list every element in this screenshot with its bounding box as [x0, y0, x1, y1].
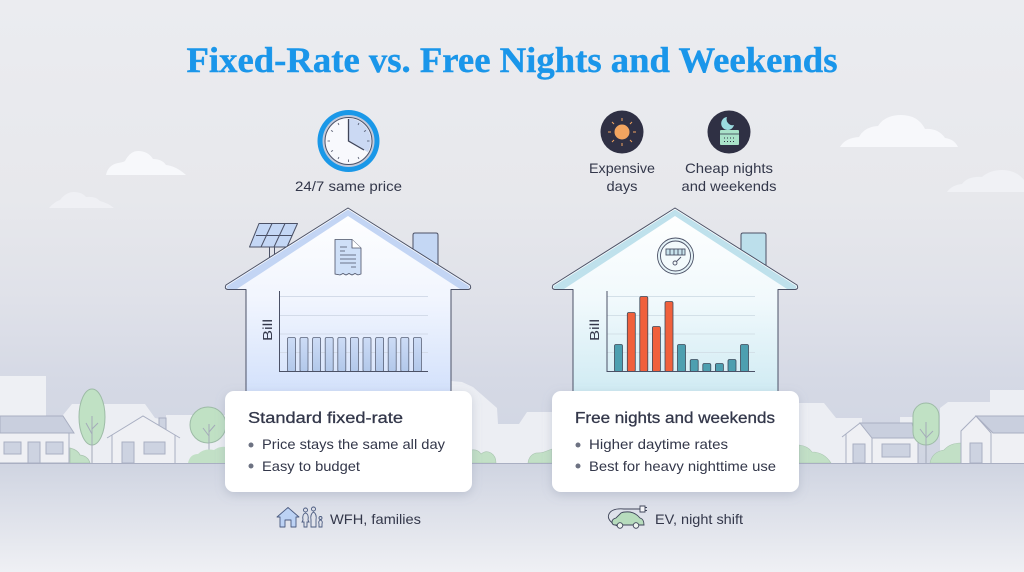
cloud: upper left	[106, 151, 186, 175]
label: EV, night shift: EV, night shift	[655, 511, 743, 527]
bush	[930, 443, 961, 463]
icon: moon and calendar	[708, 110, 750, 154]
house: gabled with wing	[842, 423, 918, 463]
icon: electric car	[608, 506, 647, 528]
bullet list: Higher daytime rates	[589, 436, 728, 452]
bullet list: Price stays the same all day	[262, 436, 445, 452]
icon: electric meter	[658, 238, 694, 274]
label: expensive days: days	[606, 178, 638, 194]
bush beside right card	[528, 449, 552, 463]
card heading: Standard fixed-rate	[248, 410, 403, 427]
ground	[0, 463, 1024, 572]
house body	[552, 208, 798, 392]
chimney	[741, 233, 766, 270]
chart: time-of-use bill: Bill	[587, 319, 602, 341]
chimney	[413, 233, 438, 270]
house: far right	[961, 416, 1024, 463]
house: small gabled	[107, 416, 180, 463]
tree and bush	[188, 407, 226, 463]
label: expensive days	[589, 160, 655, 194]
label: expensive days: Expensive	[589, 160, 655, 176]
tree	[913, 403, 939, 463]
chart: flat bill	[260, 291, 428, 372]
icon: bill	[335, 240, 361, 275]
bullet list: Best for heavy nighttime use	[589, 458, 776, 474]
label: cheap nights and weekends	[682, 160, 776, 194]
label: cheap nights and weekends: and weekends	[682, 178, 776, 194]
roof edge	[554, 210, 796, 289]
cloud: lower left	[49, 192, 114, 208]
label: WFH, families: WFH, families	[330, 511, 421, 527]
cloud: upper right	[840, 115, 958, 147]
house: far left	[0, 416, 74, 463]
card: standard fixed-rate	[225, 391, 472, 492]
label: cheap nights and weekends: Cheap nights	[685, 160, 773, 176]
bullet list: Easy to budget	[262, 458, 360, 474]
roof edge	[227, 210, 469, 289]
house: left	[225, 208, 471, 392]
house: right	[552, 208, 798, 392]
ground line	[0, 462, 1024, 464]
house body	[225, 208, 471, 392]
bullet list	[248, 436, 445, 474]
bush beside left card	[471, 450, 496, 463]
label: 24/7 same price: 24/7 same price	[295, 178, 402, 194]
card heading: Free nights and weekends	[575, 410, 775, 427]
bush and tree	[70, 389, 105, 463]
card: free nights and weekends	[552, 391, 799, 492]
background blocks centre	[451, 381, 552, 463]
cloud: lower right	[947, 170, 1024, 192]
icon: house and family	[277, 507, 322, 527]
chart: flat bill: Bill	[260, 319, 275, 341]
icon: solar panel	[250, 224, 298, 260]
chart: time-of-use bill	[587, 291, 755, 372]
neighborhood left	[0, 376, 226, 463]
bush right of card	[799, 445, 831, 463]
icon: clock	[318, 110, 380, 172]
title: Fixed-Rate vs. Free Nights and Weekends	[186, 40, 838, 80]
neighborhood right	[799, 390, 1024, 463]
icon: sun	[600, 110, 644, 154]
bullet list	[576, 436, 776, 474]
